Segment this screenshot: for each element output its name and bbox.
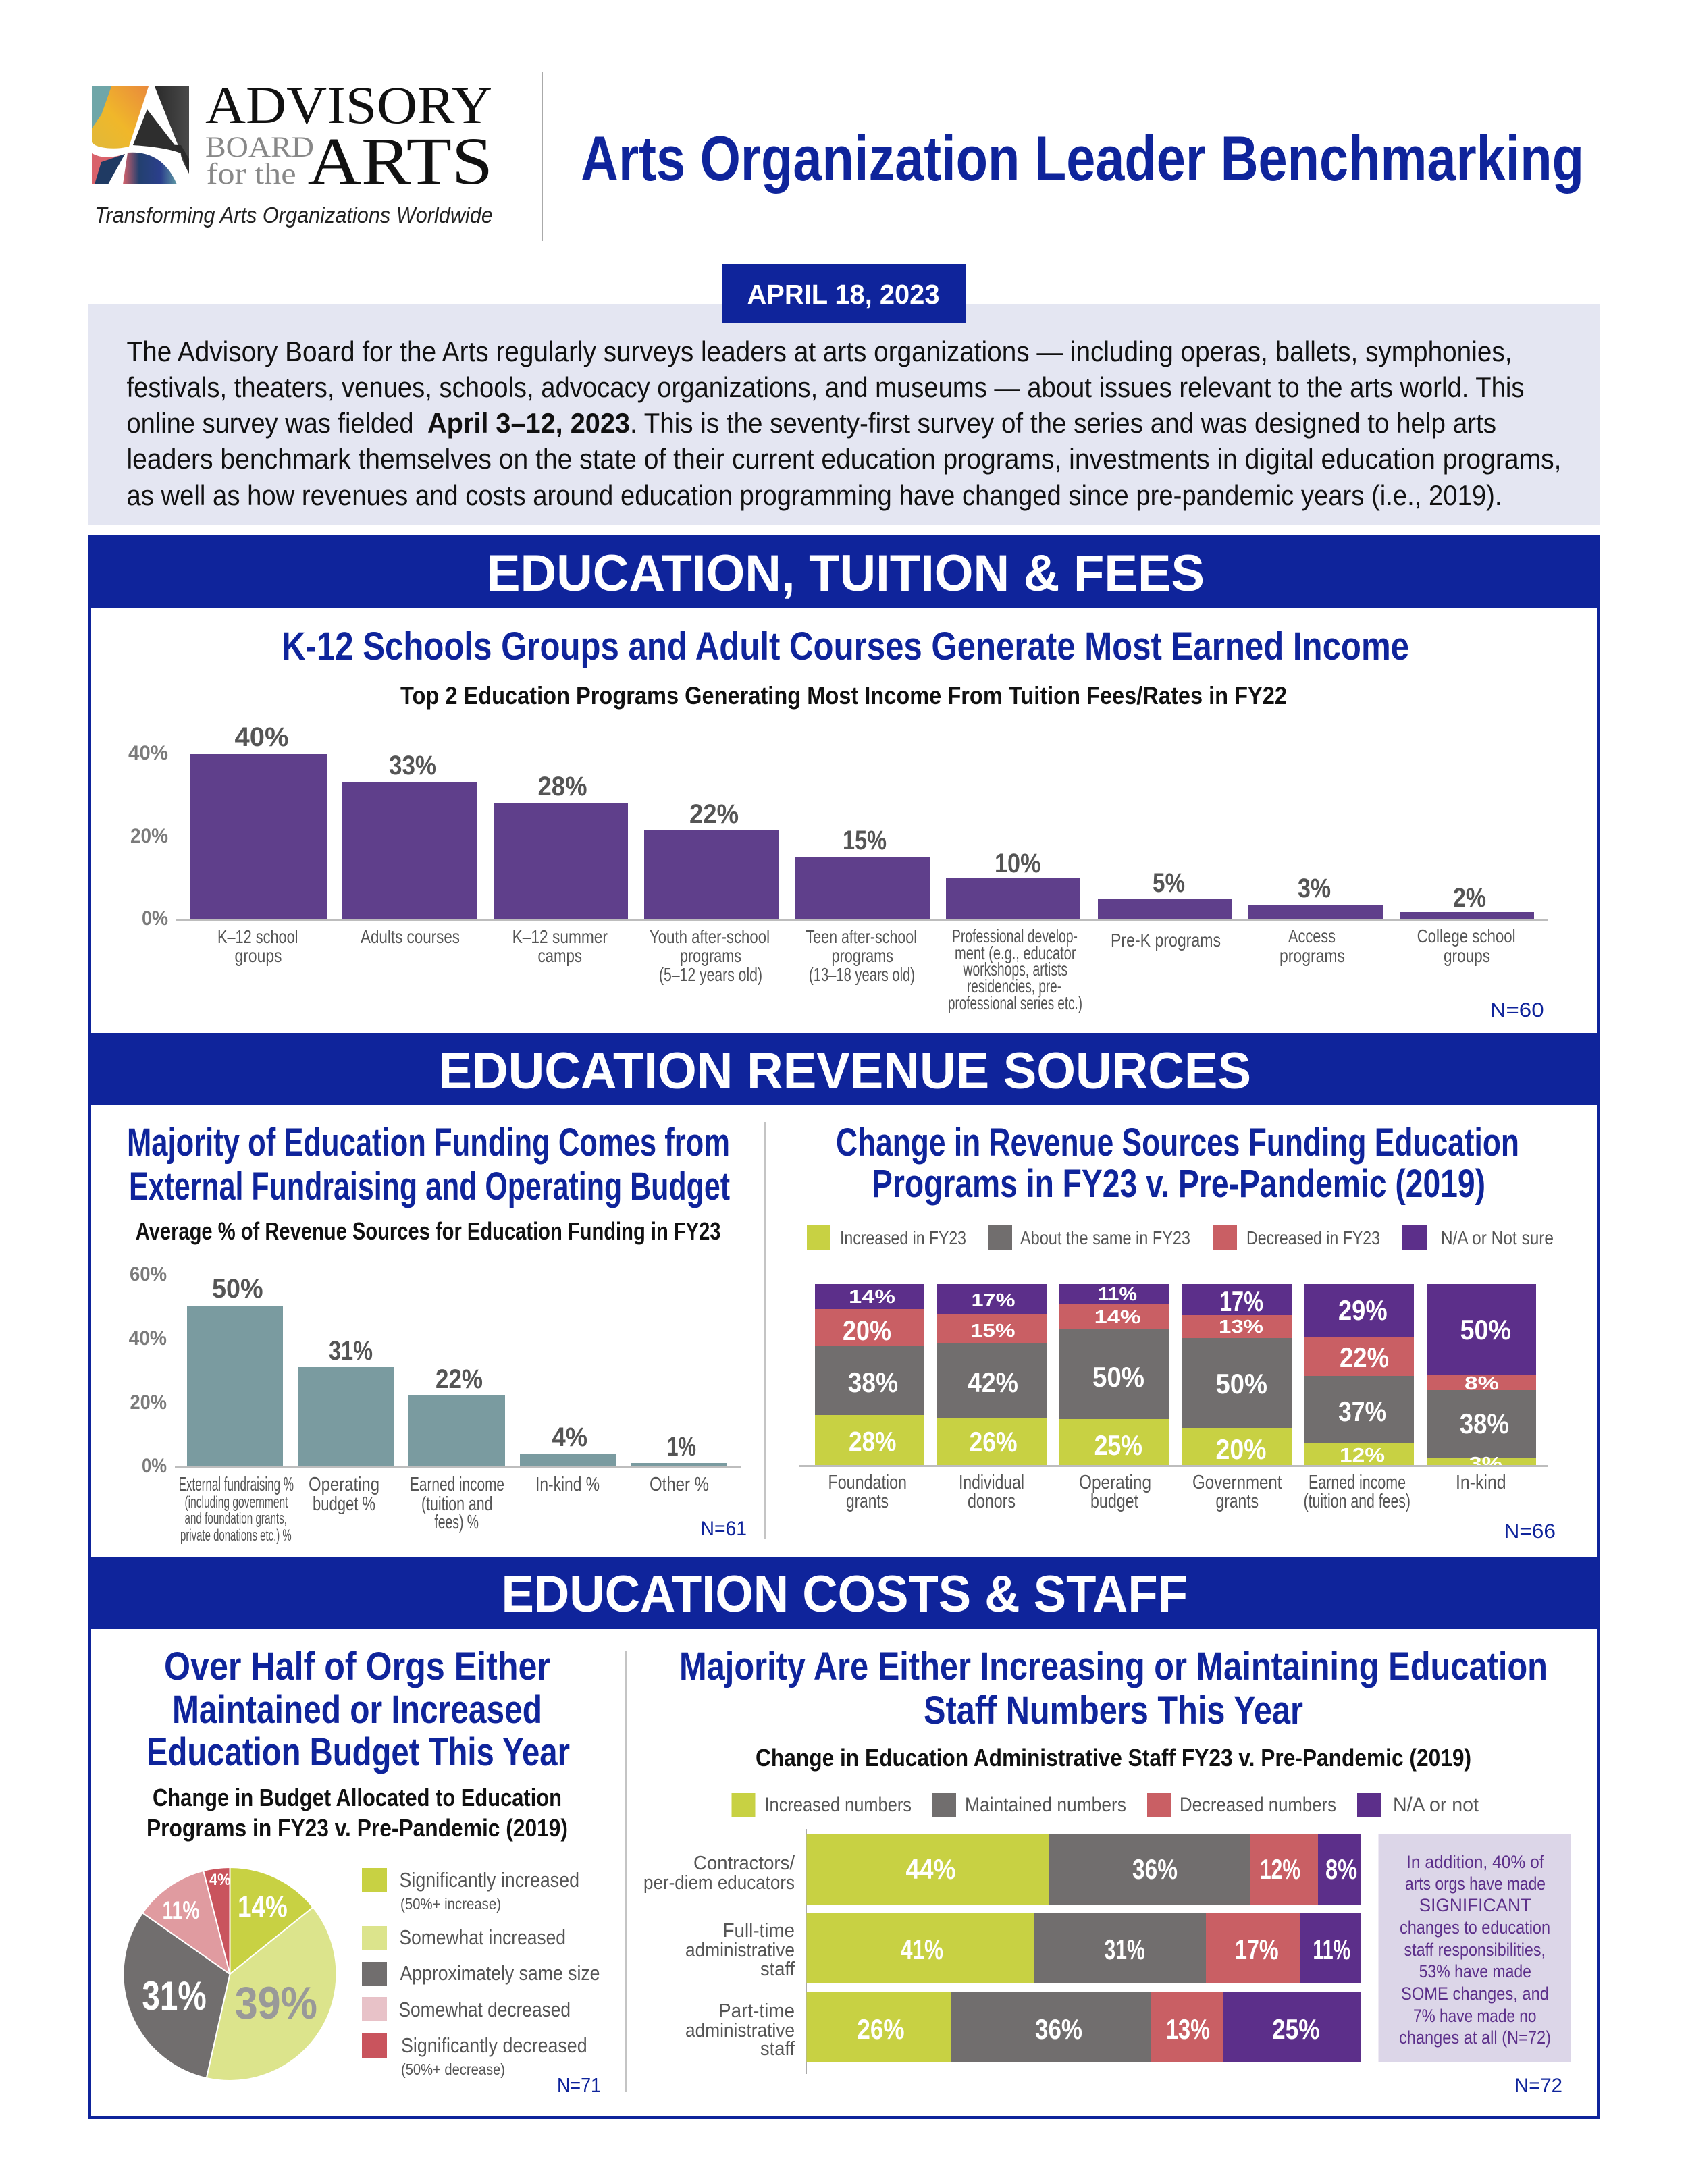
subheading: staff: Change in Education Administrative Staff FY23 v. Pre-Pandemic (2019) [756, 1744, 1471, 1772]
bar chart: revenue sources: 50% [212, 1274, 263, 1304]
subheading: budget [147, 1784, 568, 1842]
legend: revenue change: N/A or Not sure [1441, 1227, 1554, 1248]
subheading: budget: Programs in FY23 v. Pre-Pandemic (2019) [147, 1814, 568, 1842]
bar chart: education programs: (13–18 years old) [809, 964, 915, 985]
legend: budget change [362, 1868, 600, 2078]
sample size note: N=72 [1514, 2075, 1562, 2097]
column: government grants [1182, 1284, 1292, 1465]
bar chart: education programs: College school [1417, 926, 1516, 947]
callout: staff responsibilities: In addition, 40% of [1406, 1852, 1544, 1872]
bar chart: education programs: camps [537, 945, 582, 966]
logo wordmark [205, 76, 493, 198]
bar chart: education programs: residencies, pre- [967, 976, 1061, 996]
bar chart: revenue sources: 4% [552, 1422, 587, 1452]
sample size note: N=61 [701, 1518, 747, 1540]
column: foundation grants: 20% [843, 1314, 891, 1346]
column: earned income: 37% [1338, 1395, 1386, 1427]
row: contractors: 8% [1325, 1853, 1357, 1885]
row: full-time staff [685, 1913, 1361, 1983]
logo wordmark: BOARD [205, 132, 314, 163]
column: earned income: 22% [1340, 1341, 1389, 1373]
stacked bar chart: revenue change [799, 1283, 1548, 1512]
row: part-time staff: administrative [685, 2020, 795, 2042]
bar chart: education programs: 20% [130, 825, 168, 847]
section: Education Costs & Staff [88, 1557, 1600, 2097]
callout: staff responsibilities: changes at all (N=72) [1399, 2027, 1551, 2048]
section: Education Revenue Sources [88, 1033, 1600, 1545]
intro text: leaders benchmark themselves on the state of their current education programs, investments in digital education programs, [127, 443, 1561, 475]
bar chart: revenue sources: Other % [650, 1474, 709, 1495]
heading: K-12 Schools Groups and Adult Courses Generate Most Earned Income [282, 624, 1409, 668]
row: contractors: 12% [1260, 1853, 1300, 1885]
callout: staff responsibilities: SIGNIFICANT [1419, 1895, 1531, 1915]
column: operating budget: 14% [1094, 1306, 1141, 1327]
legend: revenue change [807, 1225, 1554, 1250]
column: government grants: 50% [1215, 1368, 1267, 1400]
bar chart: revenue sources: 0% [142, 1455, 167, 1477]
row: contractors: per-diem educators [643, 1872, 795, 1894]
pie chart: budget change: 31% [142, 1973, 207, 2019]
bar chart: education programs: 2% [1453, 883, 1486, 913]
bar chart: education programs: 40% [128, 742, 168, 764]
column: foundation grants [815, 1284, 924, 1465]
panel: introduction [88, 304, 1600, 525]
row: part-time staff: staff [760, 2038, 795, 2060]
bar chart: education programs: Professional develop- [952, 926, 1078, 947]
intro text: The Advisory Board for the Arts regularly surveys leaders at arts organizations — including operas, ballets, symphonies, [127, 336, 1512, 367]
section header: EDUCATION REVENUE SOURCES [439, 1042, 1251, 1100]
section: Education, Tuition & Fees [88, 535, 1600, 1021]
bar chart: revenue sources: private donations etc.) % [180, 1526, 292, 1545]
subheading: Top 2 Education Programs Generating Most Income From Tuition Fees/Rates in FY22 [400, 682, 1287, 710]
column: foundation grants: 14% [849, 1286, 895, 1307]
stacked bar chart: revenue change: budget [1090, 1491, 1138, 1512]
stacked bar chart: revenue change: (tuition and fees) [1304, 1491, 1410, 1512]
heading: budget: Maintained or Increased [172, 1688, 542, 1732]
bar chart: revenue sources: budget % [313, 1493, 375, 1515]
logo wordmark: for the [207, 157, 296, 190]
horizontal stacked bar chart: staff change [643, 1829, 1361, 2074]
intro text: online survey was fielded [127, 407, 413, 439]
legend: budget change: (50%+ increase) [400, 1895, 501, 1913]
subheading: budget: Change in Budget Allocated to Education [153, 1784, 562, 1811]
row: part-time staff: 36% [1035, 2013, 1082, 2045]
section header [88, 1033, 1600, 1105]
legend: budget change: Somewhat decreased [398, 1998, 571, 2021]
column: government grants: 20% [1215, 1433, 1267, 1465]
column: individual donors: 15% [970, 1320, 1016, 1341]
column: earned income: 29% [1338, 1294, 1388, 1326]
heading: staff [679, 1645, 1548, 1732]
bar chart: education programs: ment (e.g., educator [955, 942, 1076, 963]
section header: EDUCATION, TUITION & FEES [487, 545, 1205, 602]
stacked bar chart: revenue change: Government [1192, 1472, 1282, 1493]
bar chart: revenue sources: 31% [329, 1336, 373, 1366]
column: operating budget: 11% [1098, 1283, 1137, 1304]
bar chart: education programs: (5–12 years old) [659, 964, 762, 985]
column: in-kind: 8% [1465, 1373, 1499, 1393]
bar chart: education programs: Youth after-school [650, 926, 770, 947]
stacked bar chart: revenue change: grants [1215, 1491, 1259, 1512]
stacked bar chart: revenue change: Operating [1079, 1472, 1151, 1493]
callout: staff responsibilities: 7% have made no [1413, 2006, 1537, 2026]
bar chart: revenue sources: (including government [185, 1493, 288, 1512]
row: part-time staff: 26% [857, 2013, 905, 2045]
date badge: APRIL 18, 2023 [747, 279, 940, 310]
subheading: Average % of Revenue Sources for Education Funding in FY23 [136, 1217, 720, 1245]
heading: staff: Majority Are Either Increasing or Maintaining Education [679, 1645, 1548, 1688]
stacked bar chart: revenue change: donors [968, 1491, 1016, 1512]
legend: revenue change: About the same in FY23 [1020, 1227, 1190, 1248]
pie chart: budget change [124, 1867, 336, 2081]
sample size note: N=66 [1504, 1520, 1556, 1543]
legend: staff change: Maintained numbers [965, 1794, 1126, 1816]
column: operating budget: 50% [1092, 1361, 1144, 1393]
callout: staff responsibilities: 53% have made [1419, 1961, 1531, 1981]
bar chart: education programs: programs [680, 945, 741, 966]
column: earned income [1304, 1284, 1414, 1466]
row: full-time staff: 41% [901, 1934, 943, 1965]
bar chart: education programs: groups [1444, 945, 1490, 966]
legend: revenue change: Decreased in FY23 [1246, 1227, 1380, 1248]
intro text: festivals, theaters, venues, schools, advocacy organizations, and museums — about issues relevant to the arts world. This [127, 371, 1525, 403]
row: full-time staff: administrative [685, 1940, 795, 1961]
stacked bar chart: revenue change: In-kind [1456, 1472, 1506, 1493]
stacked bar chart: revenue change: grants [846, 1491, 889, 1512]
column: earned income: 12% [1340, 1445, 1385, 1466]
bar chart: education programs: 33% [389, 751, 436, 780]
bar chart: education programs: K–12 school [217, 926, 298, 947]
bar chart: revenue sources: (tuition and [421, 1493, 493, 1515]
bar chart: revenue sources: Earned income [410, 1474, 504, 1495]
intro text: . This is the seventy-first survey of the series and was designed to help arts [630, 407, 1496, 439]
pie chart: budget change: 11% [162, 1896, 200, 1924]
bar chart: education programs: programs [832, 945, 893, 966]
section header [88, 1557, 1600, 1629]
column: individual donors [937, 1284, 1047, 1465]
row: full-time staff: Full-time [723, 1920, 795, 1942]
bar chart: education programs: professional series etc.) [948, 992, 1082, 1013]
bar chart: education programs: Adults courses [361, 926, 460, 947]
intro text [127, 336, 1561, 511]
row: part-time staff: 25% [1272, 2013, 1320, 2045]
row: contractors: 44% [906, 1853, 956, 1885]
row: contractors: Contractors/ [693, 1853, 795, 1874]
heading: majority of funding: Majority of Education Funding Comes from [127, 1121, 730, 1165]
row: contractors [643, 1834, 1361, 1905]
column: individual donors: 17% [971, 1289, 1016, 1310]
column: foundation grants: 38% [848, 1366, 898, 1398]
column: government grants: 13% [1219, 1316, 1263, 1337]
heading: majority of funding: External Fundraising and Operating Budget [129, 1165, 730, 1208]
bar chart: education programs: groups [235, 945, 282, 966]
bar chart: revenue sources: 20% [130, 1391, 167, 1414]
column: in-kind: 38% [1460, 1408, 1509, 1439]
legend: staff change [732, 1793, 1479, 1817]
bar chart: education programs: 5% [1153, 868, 1185, 898]
column: in-kind: 3% [1469, 1453, 1502, 1474]
row: full-time staff: 31% [1105, 1934, 1145, 1965]
logo: Advisory Board for the Arts [92, 76, 493, 228]
bar chart: revenue sources: External fundraising % [179, 1474, 294, 1495]
row: full-time staff: 11% [1313, 1934, 1350, 1965]
legend: staff change: N/A or not [1393, 1794, 1479, 1816]
column: in-kind [1427, 1284, 1536, 1474]
intro text: as well as how revenues and costs around education programming have changed since pre-pandemic years (i.e., 2019). [127, 479, 1502, 511]
bar chart: education programs: Pre-K programs [1111, 930, 1221, 951]
intro text: April 3–12, 2023 [427, 407, 630, 439]
bar chart: education programs: 0% [142, 907, 168, 930]
bar chart: revenue sources: Operating [309, 1474, 379, 1495]
column: individual donors: 26% [970, 1426, 1017, 1458]
stacked bar chart: revenue change: Individual [959, 1472, 1024, 1493]
row: part-time staff: Part-time [718, 2000, 795, 2022]
legend: budget change: Approximately same size [400, 1961, 600, 1985]
pie chart: budget change: 14% [238, 1890, 288, 1923]
heading: change in revenue sources [836, 1121, 1519, 1206]
row: part-time staff: 13% [1166, 2013, 1210, 2045]
bar chart: revenue sources: and foundation grants, [185, 1510, 287, 1528]
heading: staff: Staff Numbers This Year [924, 1688, 1303, 1732]
row: part-time staff [685, 1992, 1361, 2062]
bar chart: education programs: Teen after-school [806, 926, 917, 947]
logo wordmark: ADVISORY [205, 76, 492, 134]
pie chart: budget change: 4% [209, 1871, 231, 1889]
row: contractors: 36% [1132, 1853, 1178, 1885]
bar chart: revenue sources [129, 1263, 741, 1545]
icon: logo mark [92, 86, 189, 184]
bar chart: revenue sources: 22% [436, 1364, 483, 1394]
date badge [722, 264, 966, 323]
bar chart: revenue sources: 60% [130, 1263, 167, 1285]
callout: staff responsibilities: arts orgs have made [1405, 1873, 1546, 1894]
heading: budget: Education Budget This Year [147, 1730, 570, 1774]
legend: revenue change: Increased in FY23 [840, 1227, 966, 1248]
legend: budget change: (50%+ decrease) [401, 2060, 505, 2078]
pie chart: budget change: 39% [235, 1977, 317, 2029]
legend: budget change: Somewhat increased [400, 1925, 566, 1949]
heading: majority of funding [127, 1121, 730, 1208]
heading: budget [147, 1645, 570, 1774]
column: operating budget [1059, 1283, 1169, 1465]
bar chart: education programs: 22% [689, 799, 739, 829]
stacked bar chart: revenue change: Foundation [828, 1472, 907, 1493]
bar chart: education programs: workshops, artists [963, 959, 1067, 980]
legend: budget change: Significantly increased [400, 1868, 579, 1892]
logo tagline: Transforming Arts Organizations Worldwide [95, 203, 493, 228]
column: individual donors: 42% [968, 1366, 1018, 1398]
callout: staff responsibilities: staff responsibilities, [1404, 1940, 1546, 1960]
bar chart: revenue sources: 40% [129, 1327, 167, 1350]
bar chart: education programs [128, 722, 1548, 1013]
section header [88, 535, 1600, 608]
bar chart: education programs: 3% [1298, 874, 1331, 903]
legend: budget change: Significantly decreased [401, 2033, 587, 2057]
bar chart: education programs: 10% [995, 849, 1041, 878]
bar chart: education programs: 15% [843, 826, 887, 855]
logo wordmark: ARTS [308, 124, 493, 198]
callout: staff responsibilities: changes to education [1400, 1917, 1550, 1938]
column: government grants: 17% [1219, 1285, 1263, 1317]
section header: EDUCATION COSTS & STAFF [501, 1566, 1188, 1623]
column: in-kind: 50% [1460, 1314, 1511, 1346]
bar chart: education programs: 40% [235, 722, 289, 752]
column: foundation grants: 28% [849, 1426, 897, 1457]
bar chart: revenue sources: In-kind % [535, 1474, 600, 1495]
column: operating budget: 25% [1094, 1429, 1142, 1461]
bar chart: revenue sources: fees) % [434, 1512, 479, 1533]
bar chart: education programs: K–12 summer [512, 926, 608, 947]
bar chart: education programs: 28% [537, 772, 587, 801]
stacked bar chart: revenue change: Earned income [1309, 1472, 1406, 1493]
callout: staff responsibilities: SOME changes, and [1401, 1983, 1549, 2004]
legend: staff change: Increased numbers [764, 1794, 912, 1816]
bar chart: education programs: Access [1288, 926, 1336, 947]
sample size note: N=71 [557, 2073, 601, 2097]
legend: staff change: Decreased numbers [1180, 1794, 1336, 1816]
bar chart: education programs: programs [1280, 945, 1345, 966]
row: full-time staff: staff [760, 1959, 795, 1980]
row: full-time staff: 17% [1235, 1934, 1279, 1965]
heading: budget: Over Half of Orgs Either [164, 1645, 550, 1688]
bar chart: revenue sources: 1% [667, 1432, 696, 1462]
callout: staff responsibilities [1379, 1834, 1571, 2062]
sample size note: N=60 [1490, 999, 1544, 1021]
heading: change in revenue sources: Programs in FY23 v. Pre-Pandemic (2019) [872, 1162, 1485, 1206]
